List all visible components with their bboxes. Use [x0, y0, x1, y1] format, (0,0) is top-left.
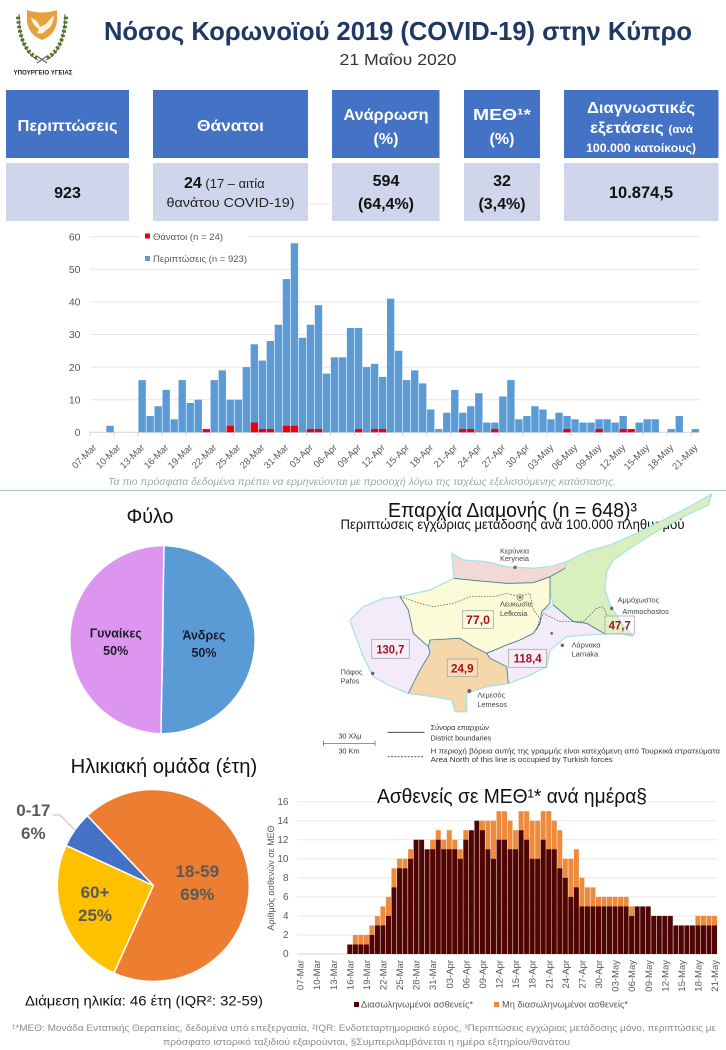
pie chart: sex: Γυναίκες [90, 626, 142, 640]
bar chart: ICU patients per day: Αριθμός ασθενών σε ΜΕΘ [266, 826, 277, 930]
bar chart: daily cases and deaths: 0 [75, 427, 81, 439]
bar chart: ICU patients per day: 03-May [611, 960, 622, 992]
map: Cyprus districts: Lemesos [477, 700, 507, 709]
icon: ministry of health emblem [14, 10, 73, 76]
panel: deaths: Θάνατοι [197, 118, 264, 135]
panel: ICU: 32 [493, 173, 511, 190]
map: Cyprus districts: Larnaka [572, 649, 599, 658]
heading: ICU patients per day: Ασθενείς σε ΜΕΘ¹* ανά ημέρα§ [377, 786, 647, 808]
bar chart: daily cases and deaths: 15-Apr [384, 442, 412, 470]
panel: diagnostic tests: 10.874,5 [609, 184, 673, 202]
bar chart: daily cases and deaths: 09-Apr [336, 442, 364, 470]
panel: diagnostic tests: εξετάσεις (ανά [590, 120, 693, 137]
footnotes: ¹*ΜΕΘ: Μονάδα Εντατικής Θεραπείας, δεδομένα υπό επεξεργασία, ²IQR: Ενδοτεταρτημοριακό εύρος, ³Περιπτώσεις εγχώριας μετάδοσης μόνο, περιπτώσεις με [12, 1023, 717, 1034]
median age note: Διάμεση ηλικία: 46 έτη (IQR²: 32-59) [25, 992, 263, 1008]
bar chart: daily cases and deaths: 03-Apr [288, 442, 316, 470]
map: Cyprus districts: 47,7 [609, 618, 631, 632]
map: Cyprus districts [323, 494, 721, 764]
bar chart: ICU patients per day: Διασωληνωμένοι ασθενείς* [361, 1000, 473, 1010]
bar chart: ICU patients per day: 12 [277, 835, 289, 846]
panel: deaths [153, 90, 308, 221]
bar chart: ICU patients per day: 15-Apr [511, 960, 522, 989]
bar chart: ICU patients per day: 21-Apr [544, 960, 555, 989]
bar chart: ICU patients per day: 4 [283, 911, 289, 922]
bar chart: daily cases and deaths: 15-May [622, 442, 652, 473]
heading: age group: Ηλικιακή ομάδα (έτη) [71, 756, 257, 778]
bar chart: ICU patients per day: 31-Mar [428, 960, 439, 990]
panel: ICU: (3,4%) [478, 196, 526, 213]
bar chart: daily cases and deaths: 06-Apr [312, 442, 340, 470]
bar chart: ICU patients per day: 21-May [710, 960, 721, 992]
bar chart: ICU patients per day: 16-Mar [345, 960, 356, 990]
panel: recovered: (64,4%) [358, 196, 414, 213]
panel: recovered: 594 [373, 173, 399, 190]
bar chart: ICU patients per day: 2 [283, 930, 289, 941]
map: Cyprus districts: 77,0 [466, 613, 490, 627]
bar chart: ICU patients per day: 09-Apr [478, 960, 489, 989]
map: Cyprus districts: Κερύνεια [500, 546, 530, 555]
bar chart: ICU patients per day: 12-Apr [495, 960, 506, 989]
map: Cyprus districts: 30 Χλμ [338, 732, 361, 741]
map: Cyprus districts: District boundaries [431, 733, 492, 742]
map: Cyprus districts: Lefkosia [500, 609, 528, 618]
bar chart: ICU patients per day: 14 [277, 816, 289, 827]
pie chart: sex: 50% [191, 646, 217, 660]
bar chart: daily cases and deaths [69, 230, 701, 473]
bar chart: daily cases and deaths: 21-May [670, 442, 701, 473]
map: Cyprus districts: Η περιοχή βόρεια αυτής της γραμμής είναι κατεχόμενη από Τουρκικά στρατεύματα [431, 746, 721, 755]
panel: deaths: θανάτου COVID-19) [166, 195, 294, 210]
heading: sex: Φύλο [126, 506, 174, 528]
bar chart: ICU patients per day: 10 [277, 854, 289, 865]
bar chart: ICU patients per day: 09-May [644, 960, 655, 992]
bar chart: daily cases and deaths: 30-Apr [504, 442, 532, 470]
pie chart: age group: 0-17 [16, 801, 50, 820]
bar chart: ICU patients per day: 19-Mar [362, 960, 373, 990]
bar chart: daily cases and deaths: 10-Mar [94, 442, 123, 471]
bar chart: daily cases and deaths: Θάνατοι (n = 24) [153, 232, 223, 243]
bar chart: ICU patients per day [266, 797, 721, 1010]
bar chart: ICU patients per day: 03-Apr [445, 960, 456, 989]
bar chart: ICU patients per day: 22-Mar [378, 960, 390, 990]
bar chart: daily cases and deaths: 16-Mar [142, 442, 171, 471]
map: Cyprus districts: Area North of this line is occupied by Turkish forces [431, 755, 613, 764]
panel: ICU: (%) [490, 131, 514, 148]
map: Cyprus districts: Pafos [341, 677, 360, 686]
bar chart: ICU patients per day: 10-Mar [312, 960, 323, 990]
footnotes: πρόσφατο ιστορικό ταξιδιού εξαιρούνται, §Συμπεριλαμβάνεται η ημέρα εξιτηρίου/θανάτου [163, 1037, 570, 1048]
bar chart: ICU patients per day: 6 [283, 892, 289, 903]
map: Cyprus districts: Αμμόχωστος [618, 596, 660, 605]
bar chart: daily cases and deaths: 03-May [526, 442, 556, 473]
bar chart: daily cases and deaths: 20 [69, 362, 81, 374]
bar chart: daily cases and deaths: 25-Mar [214, 442, 243, 471]
bar chart: daily cases and deaths: 31-Mar [262, 442, 291, 471]
bar chart: ICU patients per day: 15-May [677, 960, 688, 992]
bar chart: daily cases and deaths: 60 [69, 232, 81, 244]
bar chart: ICU patients per day: 30-Apr [594, 960, 605, 989]
map: Cyprus districts: Πάφος [341, 667, 363, 676]
panel: ICU: ΜΕΘ¹* [473, 107, 532, 124]
bar chart: daily cases and deaths: 27-Apr [480, 442, 508, 470]
bar chart: ICU patients per day: 18-Apr [528, 960, 539, 989]
panel: cases: 923 [54, 185, 81, 202]
pie chart: age group: 18-59 [176, 862, 219, 881]
bar chart: ICU patients per day: 07-Mar [296, 960, 307, 990]
icon: ministry of health emblem: ΥΠΟΥΡΓΕΙΟ ΥΓΕΙΑΣ [14, 70, 73, 76]
panel: deaths: 24 (17 – αιτία [184, 175, 265, 192]
bar chart: daily cases and deaths: 18-Apr [408, 442, 436, 470]
map: Cyprus districts: Λευκωσία [500, 600, 533, 609]
pie chart: age group: 60+ [81, 883, 109, 902]
bar chart: ICU patients per day: 25-Mar [395, 960, 406, 990]
panel: recovered: Ανάρρωση [344, 107, 428, 124]
bar chart: daily cases and deaths: 19-Mar [166, 442, 195, 471]
bar chart: ICU patients per day: 13-Mar [329, 960, 340, 990]
panel: diagnostic tests: 100.000 κατοίκους) [586, 143, 696, 155]
pie chart: age group: 69% [180, 885, 214, 904]
title: Νόσος Κορωνοϊού 2019 (COVID-19) στην Κύπρο [104, 16, 692, 46]
map: Cyprus districts: Σύνορα επαρχιών [431, 723, 489, 732]
bar chart: daily cases and deaths: 24-Apr [456, 442, 484, 470]
bar chart: ICU patients per day: 28-Mar [412, 960, 423, 990]
pie chart: age group: 6% [21, 824, 46, 843]
bar chart: daily cases and deaths: 40 [69, 296, 81, 308]
pie chart: sex: Άνδρες [182, 628, 226, 642]
bar chart: ICU patients per day: 12-May [660, 960, 671, 992]
bar chart: daily cases and deaths: 12-Apr [360, 442, 388, 470]
bar chart: ICU patients per day: Μη διασωληνωμένοι ασθενείς* [502, 1000, 628, 1010]
bar chart: daily cases and deaths: 22-Mar [190, 442, 219, 471]
bar chart: ICU patients per day: 06-May [627, 960, 638, 992]
map: Cyprus districts: 130,7 [376, 643, 405, 657]
map: Cyprus districts: Ammochostos [622, 607, 669, 616]
bar chart: daily cases and deaths: 50 [69, 264, 81, 276]
bar chart: daily cases and deaths: 30 [69, 329, 81, 341]
bar chart: daily cases and deaths: 28-Mar [238, 442, 267, 471]
panel: diagnostic tests: Διαγνωστικές [587, 100, 695, 117]
panel: ICU [464, 90, 540, 221]
bar chart: ICU patients per day: 24-Apr [561, 960, 572, 989]
pie chart: age group: 25% [78, 906, 112, 925]
bar chart: daily cases and deaths: 07-Mar [70, 442, 99, 471]
bar chart: ICU patients per day: 06-Apr [461, 960, 472, 989]
bar chart: ICU patients per day: 18-May [694, 960, 704, 992]
map subheading: Περιπτώσεις εγχώριας μετάδοσης ανά 100.000 πληθυσμού [340, 517, 684, 532]
bar chart: daily cases and deaths: 09-May [574, 442, 604, 473]
panel: diagnostic tests [564, 90, 718, 221]
pie chart: age group [16, 789, 249, 981]
heading: district of residence: Επαρχία Διαμονής (n = 648)³ [388, 500, 637, 522]
bar chart: daily cases and deaths: 13-Mar [118, 442, 147, 471]
map: Cyprus districts: Λάρνακα [572, 641, 601, 650]
pie chart: sex [71, 546, 254, 733]
bar chart: ICU patients per day: 27-Apr [578, 960, 588, 989]
bar chart: daily cases and deaths: 21-Apr [432, 442, 460, 470]
footnotes [12, 1023, 717, 1048]
date subtitle: 21 Μαΐου 2020 [340, 52, 457, 69]
bar chart: daily cases and deaths: 06-May [550, 442, 580, 473]
map: Cyprus districts: 24,9 [451, 661, 474, 675]
panel: cases: Περιπτώσεις [18, 118, 118, 135]
map: Cyprus districts: Keryneia [500, 554, 530, 563]
bar chart: ICU patients per day: 16 [277, 797, 289, 808]
map: Cyprus districts: 30 Km [338, 747, 360, 756]
bar chart: ICU patients per day: 8 [283, 873, 289, 884]
map: Cyprus districts: Λεμεσός [477, 691, 506, 700]
bar chart: ICU patients per day: 0 [283, 949, 289, 960]
panel: recovered: (%) [374, 131, 398, 148]
bar chart: daily cases and deaths: 10 [69, 394, 81, 406]
panel: cases [6, 90, 129, 221]
pie chart: sex: 50% [103, 644, 128, 658]
bar chart: daily cases and deaths: 18-May [646, 442, 676, 473]
panel: recovered [332, 90, 440, 221]
chart note: Τα πιο πρόσφατα δεδομένα πρέπει να ερμηνεύονται με προσοχή λόγω της ταχέως εξελισσόμενης κατάστασης. [108, 476, 616, 488]
bar chart: daily cases and deaths: 12-May [598, 442, 628, 473]
bar chart: daily cases and deaths: Περιπτώσεις (n = 923) [153, 254, 247, 265]
map: Cyprus districts: 118,4 [514, 652, 542, 666]
